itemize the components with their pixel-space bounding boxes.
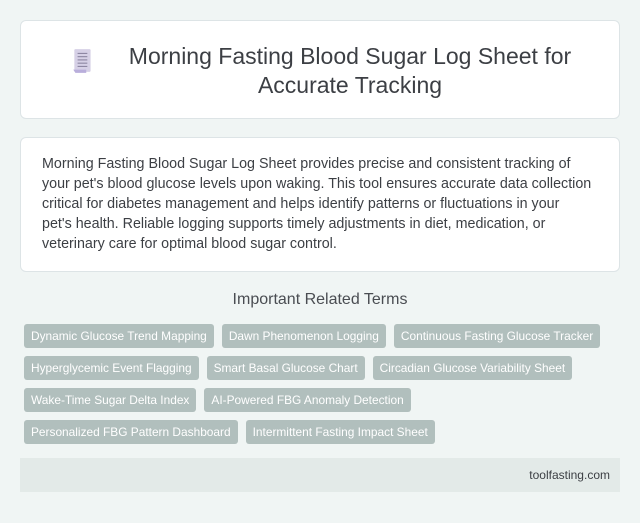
footer source: toolfasting.com (529, 468, 610, 482)
description card (20, 137, 620, 272)
description text: critical for diabetes management and helps identify patterns or fluctuations in your (42, 196, 559, 212)
footer (20, 458, 620, 492)
tags: Dawn Phenomenon Logging (229, 329, 379, 343)
section heading: Important Related Terms (233, 291, 407, 308)
tags (24, 324, 600, 444)
description text (42, 156, 591, 252)
tags: Personalized FBG Pattern Dashboard (31, 425, 231, 439)
tags: Intermittent Fasting Impact Sheet (253, 425, 428, 439)
tags: Circadian Glucose Variability Sheet (380, 361, 565, 375)
tags: Smart Basal Glucose Chart (214, 361, 358, 375)
tags: AI-Powered FBG Anomaly Detection (211, 393, 404, 407)
description text: your pet's blood glucose levels upon waking. This tool ensures accurate data collection (42, 176, 591, 192)
tags: Continuous Fasting Glucose Tracker (401, 329, 593, 343)
icon: log sheet (73, 49, 91, 73)
tags: Hyperglycemic Event Flagging (31, 361, 192, 375)
tags: Wake-Time Sugar Delta Index (31, 393, 189, 407)
tags: Dynamic Glucose Trend Mapping (31, 329, 207, 343)
description text: veterinary care for optimal blood sugar control. (42, 236, 337, 252)
description text: pet's health. Reliable logging supports timely adjustments in diet, medication, or (42, 216, 545, 232)
title: Morning Fasting Blood Sugar Log Sheet for Accurate Tracking (129, 43, 571, 98)
header card (20, 20, 620, 119)
description text: Morning Fasting Blood Sugar Log Sheet provides precise and consistent tracking of (42, 156, 570, 172)
